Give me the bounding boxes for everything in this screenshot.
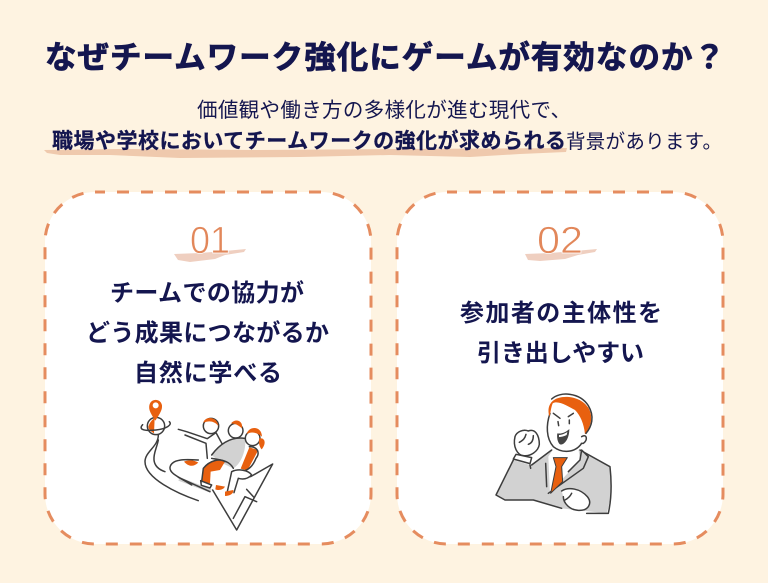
paper plane xyxy=(213,464,273,530)
panel: card 01 xyxy=(45,192,371,544)
card 02 heading: 参加者の主体性を xyxy=(460,300,662,327)
raised fist xyxy=(514,430,539,456)
intro line 2 ending: 背景があります。 xyxy=(566,131,722,153)
face xyxy=(548,405,585,451)
title: なぜチームワーク強化にゲームが有効なのか？ xyxy=(45,39,725,75)
intro text xyxy=(44,99,722,158)
goal pin xyxy=(149,400,162,421)
card 02 heading: 引き出しやすい xyxy=(477,340,644,367)
suit body xyxy=(496,450,611,513)
number 01: 01 xyxy=(190,220,230,262)
card 01 background xyxy=(45,192,371,544)
necktie xyxy=(551,458,567,493)
person 2 gray sweater xyxy=(212,438,245,468)
card 01 heading xyxy=(86,279,329,387)
person 3 woman xyxy=(237,442,258,472)
intro line 1: 価値観や働き方の多様化が進む現代で、 xyxy=(197,99,571,122)
number 02: 02 xyxy=(537,220,583,262)
icon: team riding a paper plane toward a goal pin xyxy=(141,400,273,530)
shirt collar xyxy=(548,448,580,493)
brush underline xyxy=(44,148,567,158)
person 1 pointing xyxy=(187,432,224,457)
gray wing band xyxy=(178,477,212,493)
card 02 heading xyxy=(460,300,662,367)
panel: card 02 xyxy=(397,192,723,544)
goal planet xyxy=(147,417,165,435)
woman's head xyxy=(245,431,260,446)
hair xyxy=(548,397,591,434)
expression xyxy=(553,413,573,426)
card 01 heading: どう成果につながるか xyxy=(86,319,329,347)
number underline 01 xyxy=(174,249,246,262)
trail xyxy=(145,435,198,501)
number underline 02 xyxy=(525,249,597,261)
icon: businessman with raised fist xyxy=(496,394,611,513)
card 01 heading: 自然に学べる xyxy=(134,360,282,387)
intro line 2 emphasis: 職場や学校においてチームワークの強化が求められる xyxy=(52,129,566,153)
flame xyxy=(184,460,198,466)
card 02 background xyxy=(397,192,723,544)
lower fist xyxy=(562,489,590,510)
card 01 heading: チームでの協力が xyxy=(110,279,304,307)
